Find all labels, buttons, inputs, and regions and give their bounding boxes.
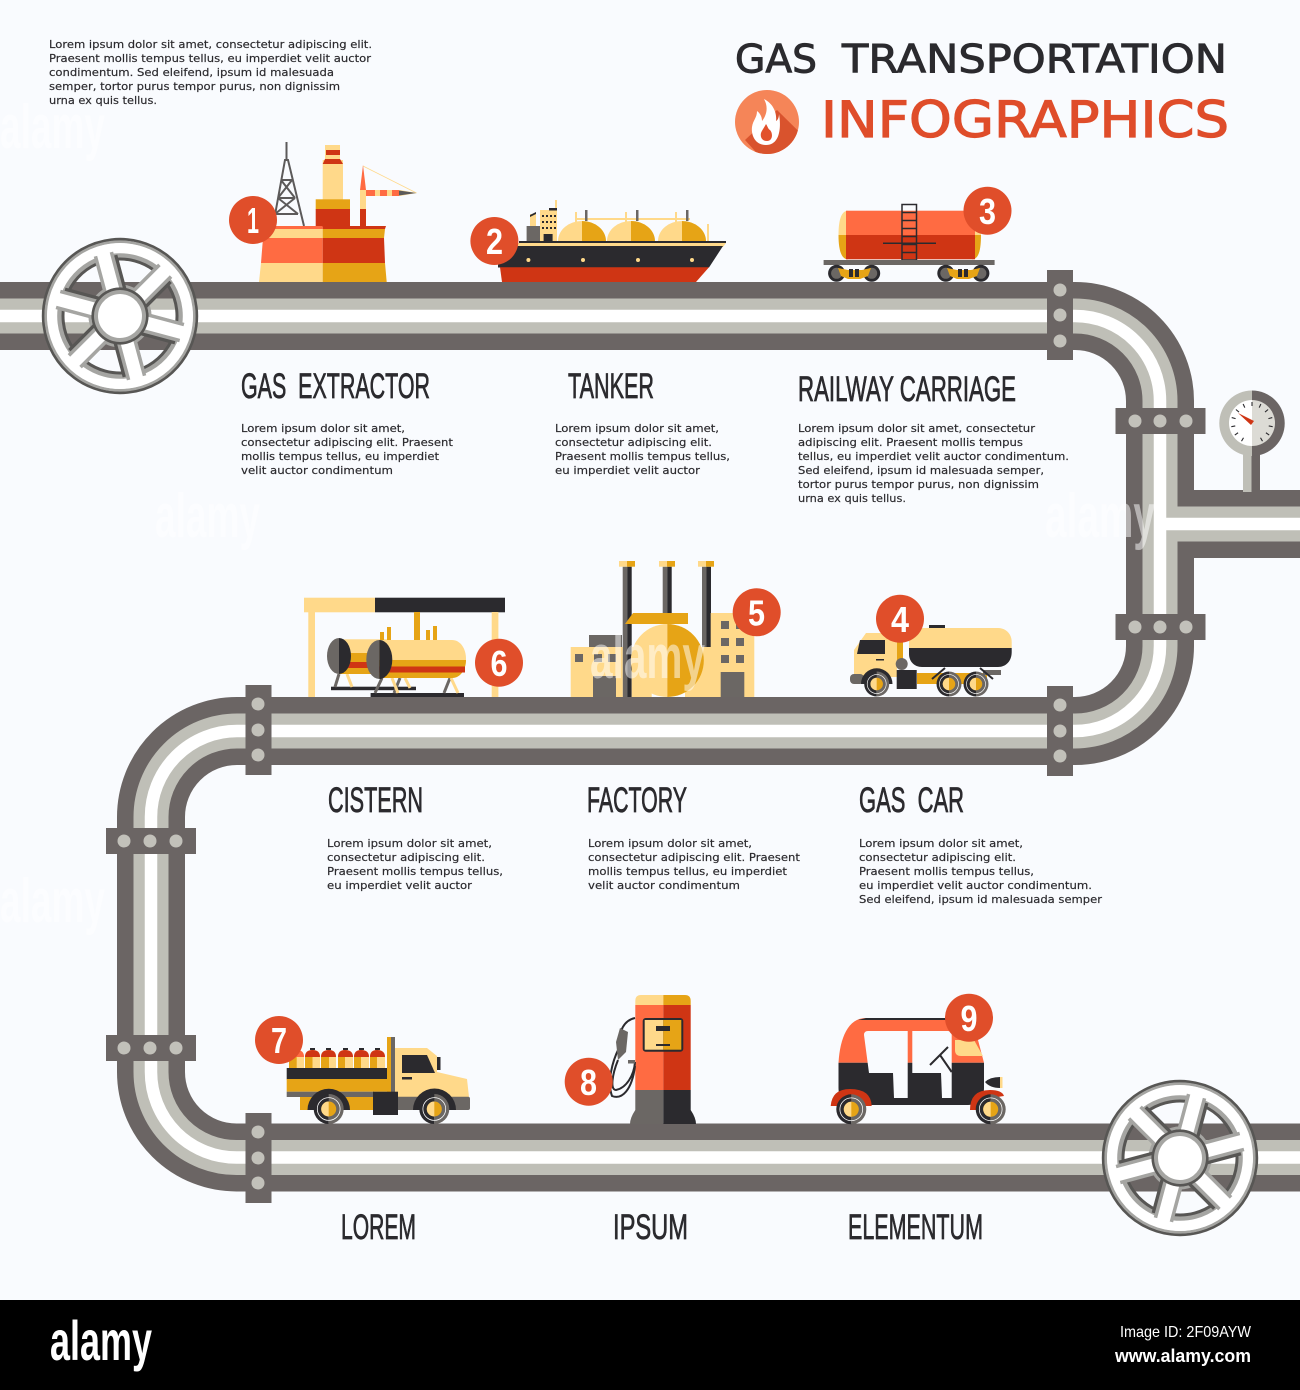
heading: railway carriage: RAILWAY CARRIAGE: [798, 369, 1016, 409]
badge 3: 3: [979, 191, 996, 232]
text: factory description: [588, 837, 801, 892]
watermarks: alamy: [0, 93, 105, 162]
heading: cistern: CISTERN: [328, 780, 423, 820]
text: factory description: Lorem ipsum dolor sit amet,: [588, 837, 752, 850]
badge 5: [733, 588, 781, 636]
icon: LNG tanker ship: [498, 200, 726, 282]
intro text block: urna ex quis tellus.: [49, 94, 157, 107]
heading: gas extractor: GAS EXTRACTOR: [241, 366, 430, 406]
footer bar: www.alamy.com: [1114, 1346, 1251, 1366]
icon: fuel pump: [610, 995, 696, 1124]
text: tanker description: consectetur adipiscing elit.: [555, 436, 712, 449]
footer bar: alamy: [50, 1309, 152, 1372]
text: gas extractor description: [241, 422, 454, 477]
icon: gas tanker truck: [850, 625, 1012, 696]
badge 4: [876, 595, 924, 643]
text: gas car description: Lorem ipsum dolor sit amet,: [859, 837, 1023, 850]
heading: factory: FACTORY: [587, 780, 687, 820]
text: cistern description: eu imperdiet velit auctor: [327, 879, 473, 892]
badge 2: [470, 217, 518, 265]
badge 6: [475, 639, 523, 687]
badge 4: 4: [891, 599, 909, 640]
pipeline: [0, 316, 1300, 1158]
text: gas extractor description: Lorem ipsum dolor sit amet,: [241, 422, 405, 435]
panel: tanker: [470, 200, 730, 477]
badge 9: 9: [960, 998, 978, 1039]
badge 5: 5: [748, 592, 765, 634]
watermarks: alamy: [155, 482, 260, 551]
badge 7: 7: [271, 1020, 287, 1061]
intro text block: semper, tortor purus tempor purus, non dignissim: [49, 80, 340, 93]
text: gas car description: Praesent mollis tempus tellus,: [859, 865, 1034, 878]
title: INFOGRAPHICS: [821, 91, 1229, 149]
icon: cylinder truck: [287, 1037, 470, 1124]
text: factory description: consectetur adipiscing elit. Praesent: [588, 851, 801, 864]
icon: gas cisterns under canopy: [304, 598, 505, 697]
badge 1: [229, 196, 277, 244]
badge 7: [255, 1016, 303, 1064]
text: gas extractor description: mollis tempus tellus, eu imperdiet: [241, 450, 440, 463]
text: tanker description: eu imperdiet velit auctor: [555, 464, 701, 477]
footer bar: Image ID: 2F09AYW: [1120, 1324, 1252, 1341]
heading: elementum: ELEMENTUM: [848, 1207, 983, 1247]
icon: left valve wheel: [26, 222, 214, 410]
title: TRANSPORTATION: [841, 38, 1227, 82]
badge 9: [945, 994, 993, 1042]
text: railway carriage description: Lorem ipsum dolor sit amet, consectetur: [798, 422, 1035, 435]
panel: factory: [571, 561, 801, 892]
icon: flame badge: [735, 90, 799, 154]
icon: right valve wheel: [1086, 1064, 1274, 1252]
text: cistern description: Praesent mollis tempus tellus,: [327, 865, 503, 878]
text: tanker description: Praesent mollis tempus tellus,: [555, 450, 730, 463]
heading: tanker: TANKER: [568, 366, 654, 406]
text: cistern description: Lorem ipsum dolor sit amet,: [327, 837, 492, 850]
title: [735, 38, 1229, 149]
footer bar: [0, 1300, 1300, 1390]
text: railway carriage description: tortor purus tempor purus, non dignissim: [798, 478, 1039, 491]
intro text block: [49, 38, 372, 107]
text: tanker description: Lorem ipsum dolor sit amet,: [555, 422, 719, 435]
heading: gas car: GAS CAR: [859, 780, 964, 820]
panel: elementum: [831, 994, 1006, 1247]
text: factory description: velit auctor condimentum: [588, 879, 740, 892]
pipe flanges: [106, 270, 1206, 1203]
text: railway carriage description: urna ex quis tellus.: [798, 492, 906, 505]
panel: ipsum: [565, 995, 696, 1247]
text: railway carriage description: tellus, eu imperdiet velit auctor condimentum.: [798, 450, 1069, 463]
intro text block: Praesent mollis tempus tellus, eu imperdiet velit auctor: [49, 52, 372, 65]
panel: railway carriage: [798, 187, 1069, 505]
text: gas car description: eu imperdiet velit auctor condimentum.: [859, 879, 1092, 892]
text: cistern description: consectetur adipiscing elit.: [327, 851, 485, 864]
text: gas car description: [859, 837, 1102, 906]
text: gas car description: Sed eleifend, ipsum id malesuada semper: [859, 893, 1102, 906]
watermarks: alamy: [0, 867, 105, 936]
title: GAS: [735, 38, 817, 82]
watermarks: alamy: [590, 623, 705, 692]
panel: lorem: [255, 1016, 470, 1247]
text: cistern description: [327, 837, 503, 892]
text: tanker description: [555, 422, 730, 477]
panel: gas extractor: [229, 142, 454, 477]
text: railway carriage description: Sed eleifend, ipsum id malesuada semper,: [798, 464, 1044, 477]
text: gas extractor description: velit auctor condimentum: [241, 464, 393, 477]
watermarks: alamy: [1045, 482, 1155, 551]
badge 3: [964, 187, 1012, 235]
intro text block: Lorem ipsum dolor sit amet, consectetur adipiscing elit.: [49, 38, 372, 51]
icon: offshore platform: [259, 142, 416, 282]
text: factory description: mollis tempus tellus, eu imperdiet: [588, 865, 788, 878]
badge 8: [565, 1058, 613, 1106]
heading: lorem: LOREM: [341, 1207, 416, 1247]
panel: cistern: [304, 598, 523, 892]
icon: pressure gauge: [1219, 390, 1285, 492]
badge 1: 1: [247, 200, 259, 241]
watermarks: [0, 93, 1155, 936]
icon: rail tank car: [824, 204, 995, 282]
heading: ipsum: IPSUM: [613, 1207, 688, 1247]
icon: gas factory: [571, 561, 754, 697]
badge 8: 8: [580, 1062, 597, 1103]
intro text block: condimentum. Sed eleifend, ipsum id malesuada: [49, 66, 334, 79]
text: railway carriage description: [798, 422, 1069, 505]
text: railway carriage description: adipiscing elit. Praesent mollis tempus: [798, 436, 1023, 449]
badge 6: 6: [490, 643, 508, 684]
icon: auto rickshaw: [831, 1018, 1006, 1124]
badge 2: 2: [486, 221, 503, 262]
text: gas extractor description: consectetur adipiscing elit. Praesent: [241, 436, 454, 449]
text: gas car description: consectetur adipiscing elit.: [859, 851, 1016, 864]
panel: gas car: [850, 595, 1102, 906]
